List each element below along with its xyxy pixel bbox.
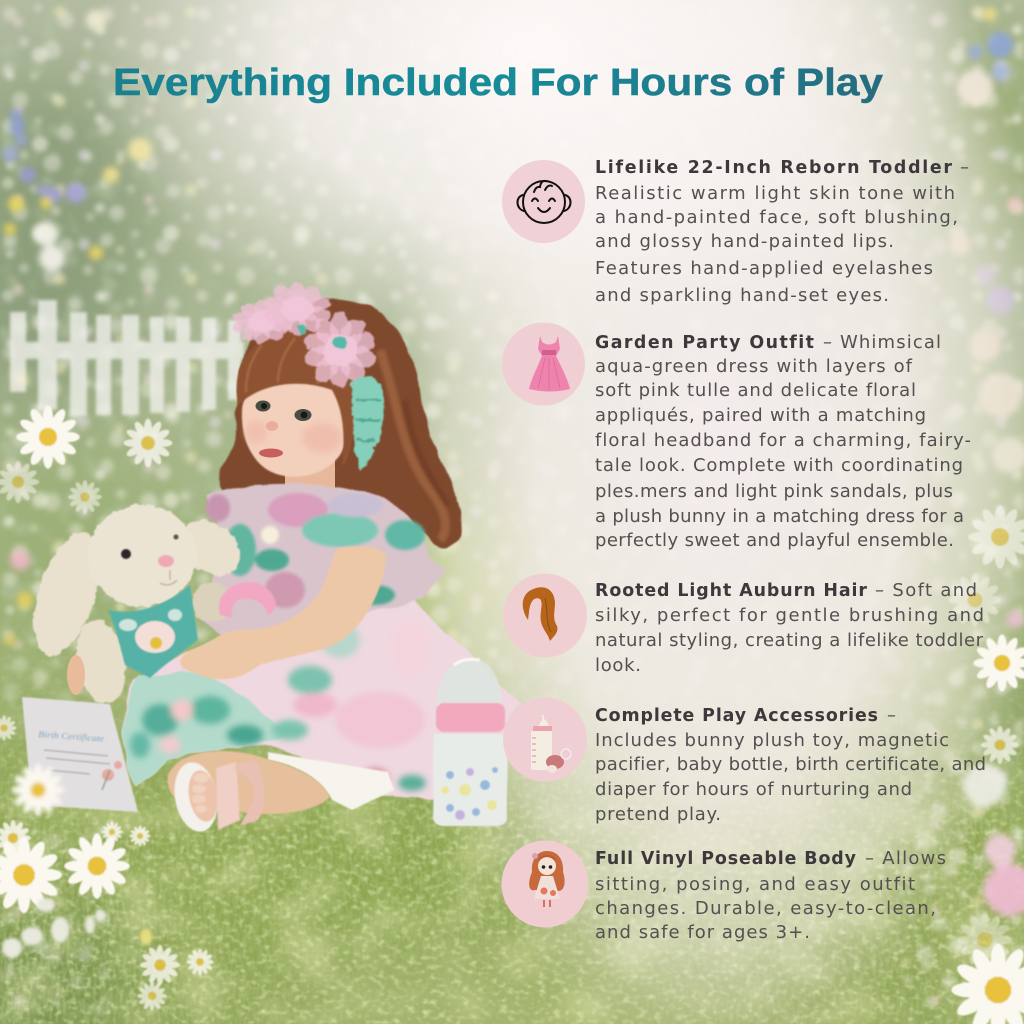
text: garden party outfit: aqua-green dress with layers of <box>595 356 913 377</box>
face <box>242 371 348 477</box>
text: reborn toddler: Lifelike 22-Inch Reborn Toddler <box>595 158 952 178</box>
text: garden party outfit: Garden Party Outfit <box>595 333 814 353</box>
text: garden party outfit: a plush bunny in a matching dress for a <box>595 506 964 527</box>
icon: bottle and pacifier <box>503 698 587 782</box>
icon: hair wig <box>503 574 587 658</box>
icon: pink dress <box>502 322 585 406</box>
foreground daisies: left meadow <box>0 405 214 1011</box>
text: garden party outfit: soft pink tulle and delicate floral <box>595 380 916 401</box>
arm and hand <box>180 546 386 679</box>
text: play accessories: pacifier, baby bottle, birth certificate, and <box>595 754 986 775</box>
text: garden party outfit: appliqués, paired with a matching <box>595 405 926 426</box>
text: garden party outfit: ples.mers and light pink sandals, plus <box>595 481 953 502</box>
text: play accessories: pretend play. <box>595 804 721 825</box>
bunny dress and face <box>108 534 198 678</box>
text: garden party outfit <box>595 332 971 551</box>
dress floral patches <box>130 620 430 791</box>
text: reborn toddler <box>595 157 969 306</box>
foreground daisies: right meadow <box>948 505 1024 1024</box>
text: play accessories: diaper for hours of nurturing and <box>595 779 912 800</box>
baby bottle <box>433 658 508 826</box>
text: auburn hair: silky, perfect for gentle brushing and <box>595 605 984 626</box>
daisy over certificate <box>11 764 65 816</box>
text: auburn hair <box>595 580 984 676</box>
white shorts and leg <box>268 752 394 810</box>
text: vinyl body <box>595 848 946 943</box>
birth certificate <box>22 697 138 812</box>
text: garden party outfit: – Whimsical <box>823 332 941 353</box>
text: vinyl body: sitting, posing, and easy outfit <box>595 874 915 895</box>
doll with bunny and accessories <box>11 283 520 835</box>
text: vinyl body: changes. Durable, easy-to-clean, <box>595 898 936 919</box>
bunny plush <box>21 505 251 708</box>
icon: baby face <box>502 160 585 243</box>
text: play accessories: Includes bunny plush toy, magnetic <box>595 730 949 751</box>
text: garden party outfit: floral headband for a charming, fairy- <box>595 430 971 451</box>
bangs <box>237 329 357 466</box>
pink pacifier ring <box>219 582 276 618</box>
birth certificate: Birth Certificate <box>38 729 104 744</box>
feature: auburn hair <box>503 574 984 676</box>
text: auburn hair: natural styling, creating a lifelike toddler <box>595 630 984 651</box>
text: reborn toddler: a hand-painted face, soft blushing, <box>595 207 958 228</box>
eyes <box>256 400 312 421</box>
text: reborn toddler: – <box>960 157 969 178</box>
feature: garden party outfit <box>502 322 971 551</box>
text: vinyl body: and safe for ages 3+. <box>595 922 810 943</box>
headband flowers <box>230 283 384 470</box>
text: reborn toddler: Realistic warm light skin tone with <box>595 183 955 204</box>
upper dress bodice <box>200 484 445 660</box>
text: garden party outfit: tale look. Complete with coordinating <box>595 455 963 476</box>
neck <box>285 455 335 500</box>
text: play accessories <box>595 705 986 825</box>
text: auburn hair: Rooted Light Auburn Hair <box>595 581 867 601</box>
nose and lips <box>266 421 278 431</box>
text: garden party outfit: perfectly sweet and playful ensemble. <box>595 530 954 551</box>
text: auburn hair: – Soft and <box>875 580 977 601</box>
dress skirt <box>123 577 520 800</box>
feature: play accessories <box>503 698 986 825</box>
text: reborn toddler: Features hand-applied eyelashes <box>595 258 933 279</box>
icon: mini doll <box>502 840 588 928</box>
heading: Everything Included For Hours of Play <box>113 62 883 104</box>
doll hand on bunny's back <box>67 655 85 695</box>
text: reborn toddler: and sparkling hand-set eyes. <box>595 285 889 306</box>
background: white picket fence <box>10 300 244 416</box>
text: vinyl body: – Allows <box>865 848 946 869</box>
text: reborn toddler: and glossy hand-painted lips. <box>595 231 894 252</box>
hair back <box>218 297 462 548</box>
text: play accessories: – <box>887 705 896 726</box>
text: auburn hair: look. <box>595 655 641 676</box>
sandal <box>169 759 264 835</box>
text: vinyl body: Full Vinyl Poseable Body <box>595 849 857 869</box>
feature: reborn toddler <box>502 157 969 306</box>
feature: vinyl body <box>502 840 946 943</box>
text: play accessories: Complete Play Accessories <box>595 706 878 726</box>
